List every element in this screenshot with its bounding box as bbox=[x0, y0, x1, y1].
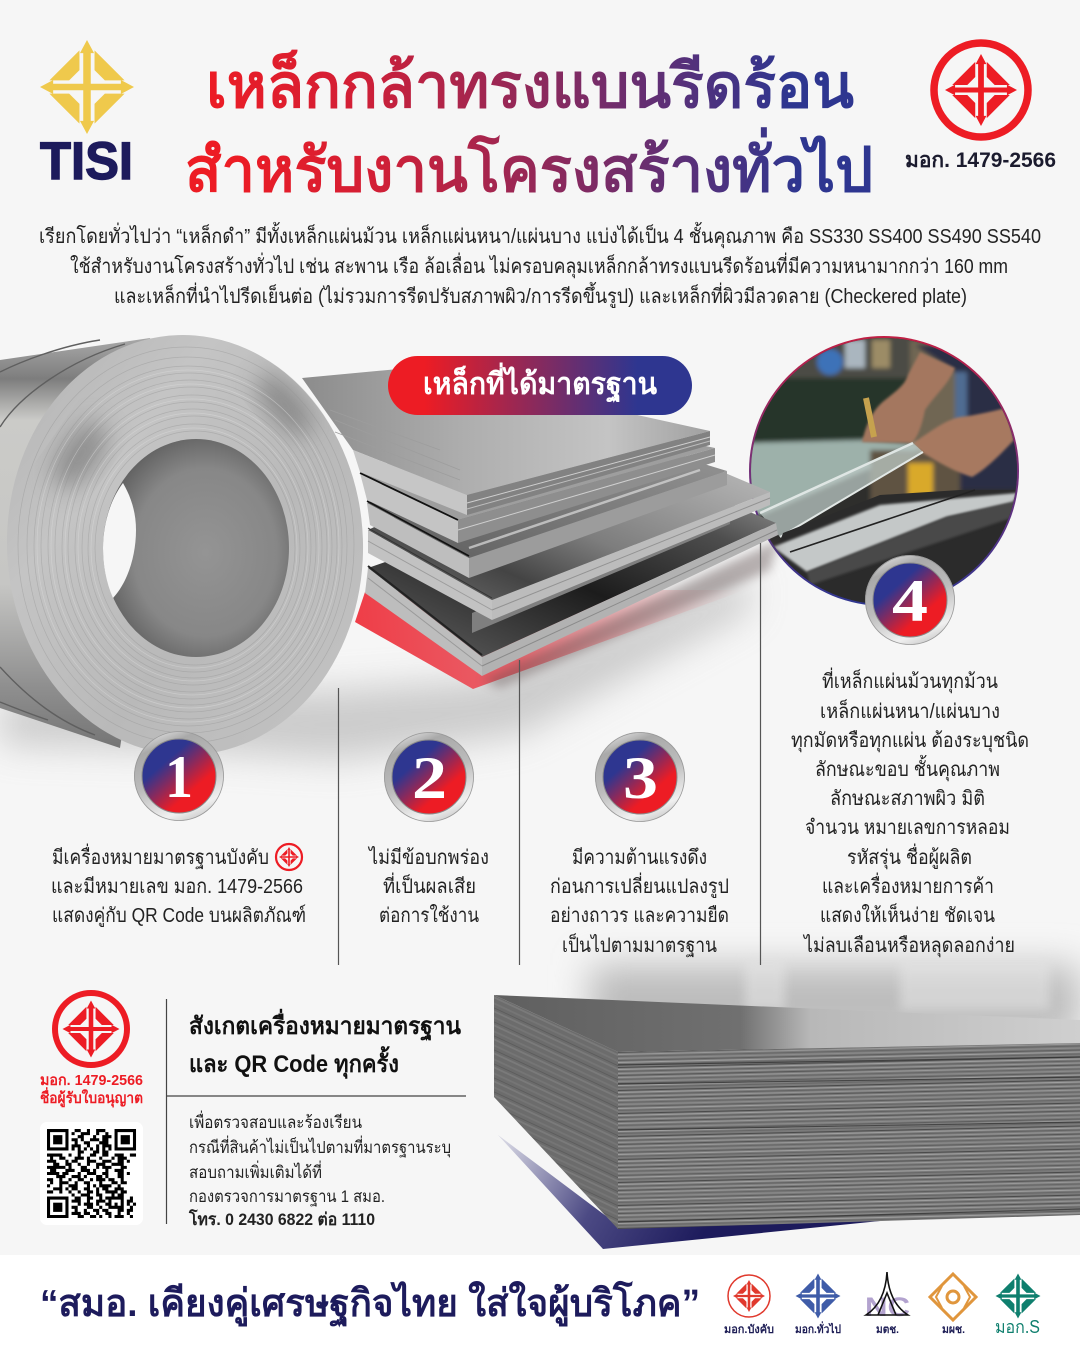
item 4 text: ทุกมัดหรือทุกแผ่น ต้องระบุชนิด bbox=[791, 730, 1029, 753]
coil face bbox=[0, 329, 370, 761]
logo: community product bbox=[930, 1274, 976, 1336]
item 4 text: ลักษณะสภาพผิว มิติ bbox=[830, 788, 985, 810]
footer band bbox=[0, 1255, 1080, 1350]
badge 3: 3 bbox=[623, 745, 658, 811]
plate 2 bbox=[360, 410, 715, 543]
standard number: มอก. 1479-2566 bbox=[905, 149, 1056, 172]
sheet stack photo bbox=[494, 995, 1080, 1229]
red accent under plates bbox=[355, 590, 745, 689]
factory backdrop bbox=[590, 960, 1080, 1040]
navy accent under sheet stack bbox=[498, 1135, 880, 1249]
item 3 text: ก่อนการเปลี่ยนแปลงรูป bbox=[550, 872, 729, 899]
logo: TCPS tower: NC bbox=[865, 1292, 910, 1322]
photo: hands measuring steel sheet bbox=[745, 335, 1025, 610]
panel heading bbox=[189, 1008, 462, 1080]
item 4 text: ไม่ลบเลือนหรือหลุดลอกง่าย bbox=[802, 934, 1015, 958]
cutting table bbox=[770, 490, 1020, 610]
QR code bbox=[40, 1122, 143, 1225]
logo: TCPS tower bbox=[865, 1272, 910, 1336]
stack left side bbox=[494, 995, 618, 1229]
item 1 text: และมีหมายเลข มอก. 1479-2566 bbox=[51, 876, 303, 898]
plate 4 bbox=[368, 420, 770, 620]
badge 4: 4 bbox=[892, 568, 928, 634]
dividers bbox=[338, 543, 760, 965]
item 4 text: และเครื่องหมายการค้า bbox=[822, 872, 994, 898]
item 3 text: อย่างถาวร และความยืด bbox=[550, 905, 729, 927]
item 2 text bbox=[367, 846, 489, 927]
title line 1: เหล็กกล้าทรงแบนรีดร้อน bbox=[206, 50, 854, 120]
right hand bbox=[913, 408, 1014, 477]
badge 3 bbox=[595, 732, 685, 822]
photo ring bbox=[749, 336, 1019, 606]
panel heading: และ QR Code ทุกครั้ง bbox=[189, 1045, 399, 1080]
item 4 text: เหล็กแผ่นหนา/แผ่นบาง bbox=[820, 698, 1000, 723]
plate 3 bbox=[367, 420, 727, 578]
item 4 text: ลักษณะขอบ ชั้นคุณภาพ bbox=[815, 755, 1000, 782]
item 1 text bbox=[51, 843, 306, 928]
left hand bbox=[862, 352, 955, 443]
intro text bbox=[39, 222, 1041, 309]
panel dividers bbox=[166, 999, 466, 1224]
logo: TCPS tower: มตช. bbox=[876, 1324, 899, 1336]
badge 2 bbox=[384, 732, 474, 822]
pill bbox=[388, 356, 692, 415]
panel body bbox=[188, 1110, 451, 1229]
logo: TISI bbox=[40, 40, 134, 191]
see-through gap bbox=[103, 483, 136, 598]
item 3 text bbox=[550, 847, 729, 957]
TISI wordmark: TISI bbox=[40, 132, 133, 191]
plate 5 bbox=[365, 470, 778, 676]
item 4 text: แสดงให้เห็นง่าย ชัดเจน bbox=[820, 902, 995, 927]
coil of steel bbox=[0, 329, 370, 761]
logo: mandatory bbox=[724, 1275, 774, 1336]
item 2 text: ไม่มีข้อบกพร่อง bbox=[367, 846, 489, 869]
plate shadow bbox=[482, 540, 778, 688]
item 2 text: ต่อการใช้งาน bbox=[379, 904, 479, 927]
mark with license holder bbox=[40, 993, 143, 1108]
item 4 text: รหัสรุ่น ชื่อผู้ผลิต bbox=[847, 843, 972, 870]
title bbox=[185, 50, 873, 204]
badge 2: 2 bbox=[412, 745, 447, 811]
panel body: สอบถามเพิ่มเติมได้ที่ bbox=[189, 1160, 322, 1182]
stack top bbox=[494, 995, 1080, 1052]
panel heading: สังเกตเครื่องหมายมาตรฐาน bbox=[189, 1008, 462, 1042]
panel body: กรณีที่สินค้าไม่เป็นไปตามที่มาตรฐานระบุ bbox=[189, 1135, 451, 1158]
logo: community product: มผช. bbox=[942, 1324, 965, 1336]
coil body bbox=[0, 338, 170, 748]
logo: general bbox=[795, 1274, 841, 1336]
icon: TISI gold mark bbox=[40, 40, 134, 134]
pen bbox=[866, 398, 874, 437]
badge 1 bbox=[134, 731, 224, 821]
panel: check the mark bbox=[40, 993, 466, 1229]
stack front side bbox=[618, 1043, 1080, 1229]
panel body: เพื่อตรวจสอบและร้องเรียน bbox=[189, 1110, 362, 1132]
panel body: โทร. 0 2430 6822 ต่อ 1110 bbox=[188, 1209, 375, 1229]
pill text: เหล็กที่ได้มาตรฐาน bbox=[423, 362, 657, 404]
logo: mandatory standard mark bbox=[905, 43, 1056, 172]
item 1 text: แสดงคู่กับ QR Code บนผลิตภัณฑ์ bbox=[52, 904, 306, 928]
pill heading bbox=[388, 356, 692, 415]
badge 4 bbox=[865, 555, 955, 645]
icon: red circle mark bbox=[934, 43, 1028, 137]
steel plates stack bbox=[302, 367, 778, 688]
logo: general: มอก.ทั่วไป bbox=[795, 1321, 841, 1336]
floor shadow bbox=[0, 575, 750, 760]
mark with license holder: ชื่อผู้รับใบอนุญาต bbox=[40, 1087, 143, 1108]
title line 2: สำหรับงานโครงสร้างทั่วไป bbox=[185, 127, 873, 204]
item 3 text: เป็นไปตามมาตรฐาน bbox=[562, 932, 717, 957]
slogan: “สมอ. เคียงคู่เศรษฐกิจไทย ใส่ใจผู้บริโภค” bbox=[40, 1280, 700, 1328]
coil hole bbox=[103, 439, 289, 657]
intro text: และเหล็กที่นำไปรีดเย็นต่อ (ไม่รวมการรีดปรับสภาพผิว/การรีดขึ้นรูป) และเหล็กที่ผิวมีลวดลาย (Checkered plate) bbox=[114, 282, 967, 309]
panel body: กองตรวจการมาตรฐาน 1 สมอ. bbox=[189, 1187, 385, 1207]
mark with license holder: มอก. 1479-2566 bbox=[40, 1072, 143, 1089]
item 2 text: ที่เป็นผลเสีย bbox=[383, 872, 476, 898]
item 3 text: มีความต้านแรงดึง bbox=[572, 847, 707, 869]
item 4 text: ที่เหล็กแผ่นม้วนทุกม้วน bbox=[822, 667, 998, 694]
badge 1: 1 bbox=[165, 744, 193, 810]
item 4 text: จำนวน หมายเลขการหลอม bbox=[805, 817, 1010, 839]
plate 1 bbox=[302, 367, 710, 515]
icon: inline mandatory mark bbox=[276, 844, 302, 870]
plate 4b bbox=[472, 505, 730, 633]
logo: S mark: มอก.S bbox=[995, 1317, 1040, 1337]
item 4 text bbox=[791, 667, 1029, 958]
logo: S mark bbox=[995, 1274, 1040, 1337]
item 1 text: มีเครื่องหมายมาตรฐานบังคับ bbox=[52, 843, 269, 869]
sheet being lifted bbox=[760, 443, 923, 537]
logo: mandatory: มอก.บังคับ bbox=[724, 1323, 774, 1336]
